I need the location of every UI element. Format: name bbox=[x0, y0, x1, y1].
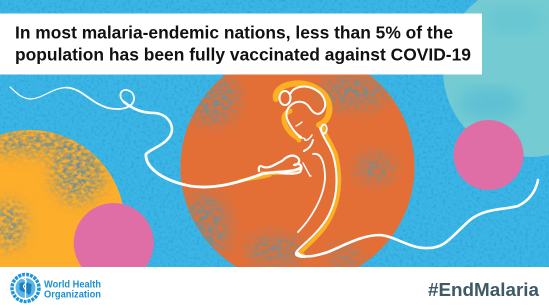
hashtag: #EndMalaria bbox=[428, 279, 540, 300]
organization name: Organization bbox=[44, 288, 101, 300]
organization name: World Health bbox=[44, 278, 101, 290]
circle: pink right bbox=[454, 120, 524, 190]
heading: In most malaria-endemic nations, less than 5% of the bbox=[15, 22, 453, 42]
figure: woman vaccinating, white line art bbox=[146, 87, 538, 257]
header panel bbox=[0, 14, 482, 74]
circle: pink left bbox=[74, 203, 154, 283]
WHO logo bbox=[12, 274, 104, 302]
heading: population has been fully vaccinated against COVID-19 bbox=[15, 44, 471, 64]
circle: teal bbox=[443, 0, 549, 157]
circle: yellow bbox=[0, 130, 123, 267]
thread: white line top left bbox=[10, 87, 172, 154]
footer panel bbox=[0, 267, 549, 308]
circle: orange bbox=[180, 74, 414, 267]
figure: woman vaccinating, yellow outline bbox=[240, 83, 339, 256]
icon: WHO emblem bbox=[12, 274, 39, 302]
